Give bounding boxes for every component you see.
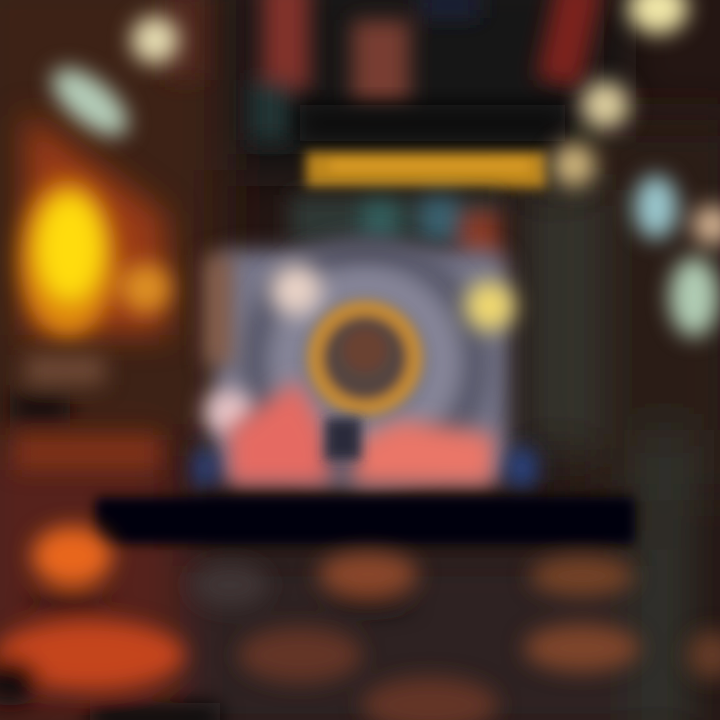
black bar [95,497,635,544]
lantern lights [41,0,720,337]
bottom glowing blobs [192,552,720,720]
central panel [193,250,538,490]
orange ring [315,308,415,408]
panel backing [216,250,508,482]
dark ceiling band [300,105,565,141]
left orange flames [0,526,220,720]
teal strip under banner [290,195,500,265]
panel concentric arcs [253,250,477,474]
blue corners [193,446,538,490]
yellow banner [306,152,546,188]
left lower details [10,355,160,470]
ring handle [325,418,361,460]
left orange sign [25,112,170,335]
salmon foreground shapes [228,380,494,484]
panel glows [204,255,515,436]
yellow glow [20,180,171,336]
top red stripes [165,0,603,140]
